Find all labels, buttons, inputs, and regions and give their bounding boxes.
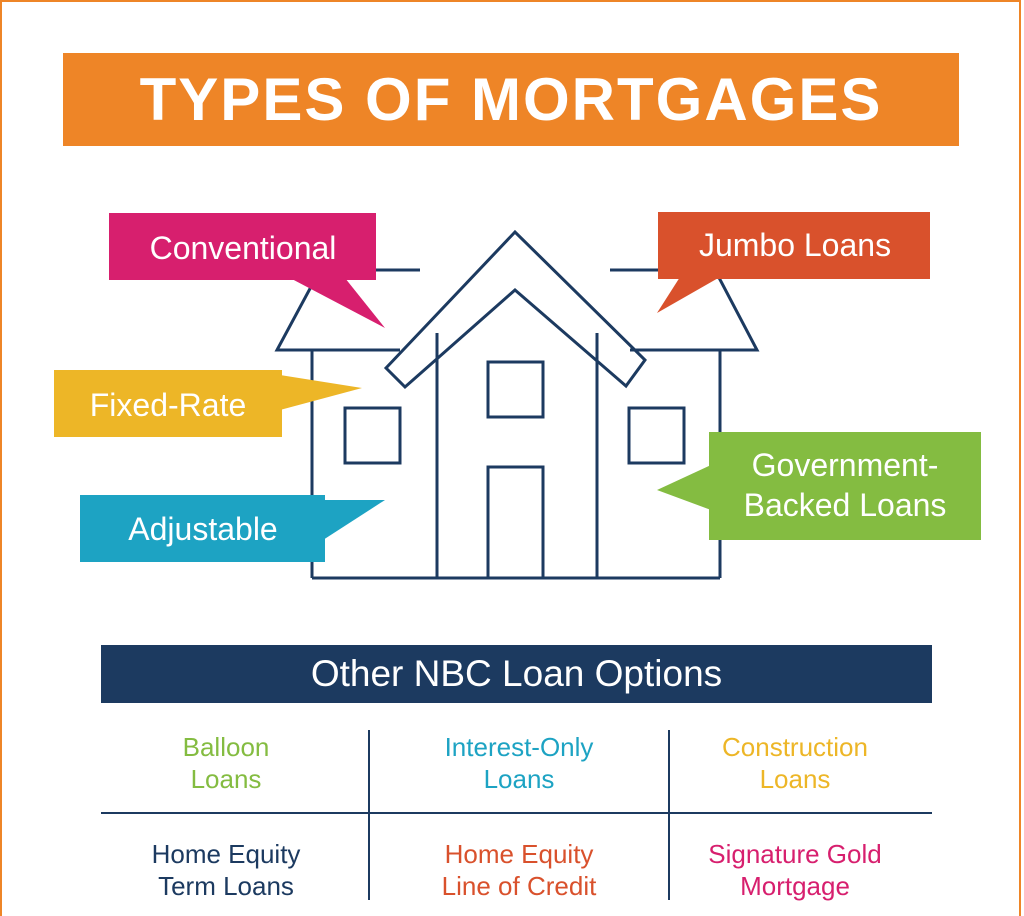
option: Interest-Only Loans <box>445 732 594 794</box>
callout: Jumbo Loans <box>657 212 930 313</box>
title: TYPES OF MORTGAGES <box>140 66 882 133</box>
option: Interest-Only Loans: Interest-Only <box>445 732 593 762</box>
callout: Conventional: Conventional <box>150 230 336 266</box>
callout: Government-Backed Loans <box>657 432 981 540</box>
icon: house <box>277 232 757 578</box>
heading: Other NBC Loan Options <box>101 645 932 703</box>
option: Home Equity Line of Credit <box>442 839 596 901</box>
option: Balloon Loans <box>183 732 269 794</box>
option: Signature Gold Mortgage <box>708 839 882 901</box>
option: Signature Gold Mortgage: Mortgage <box>740 871 850 901</box>
option: Home Equity Line of Credit: Home Equity <box>445 839 593 869</box>
title <box>63 53 959 146</box>
callout: Jumbo Loans: Jumbo Loans <box>699 227 891 263</box>
option: Construction Loans: Loans <box>760 764 830 794</box>
heading: Other NBC Loan Options: Other NBC Loan Options <box>311 653 722 694</box>
option: Interest-Only Loans: Loans <box>484 764 554 794</box>
option: Home Equity Term Loans: Term Loans <box>158 871 294 901</box>
option: Construction Loans <box>722 732 868 794</box>
option: Construction Loans: Construction <box>722 732 868 762</box>
option: Balloon Loans: Balloon <box>183 732 269 762</box>
callout: Government-Backed Loans: Backed Loans <box>744 487 946 523</box>
option: Balloon Loans: Loans <box>191 764 261 794</box>
option: Home Equity Line of Credit: Line of Credit <box>442 871 596 901</box>
option: Home Equity Term Loans: Home Equity <box>152 839 300 869</box>
callout: Government-Backed Loans: Government- <box>752 447 938 483</box>
callout: Adjustable <box>80 495 385 562</box>
option: Signature Gold Mortgage: Signature Gold <box>708 839 882 869</box>
callout: Fixed-Rate <box>54 370 362 437</box>
callout: Fixed-Rate: Fixed-Rate <box>90 387 246 423</box>
callout: Adjustable: Adjustable <box>128 511 278 547</box>
option: Home Equity Term Loans <box>152 839 300 901</box>
loan options grid <box>101 730 932 901</box>
callout: Conventional <box>109 213 385 328</box>
